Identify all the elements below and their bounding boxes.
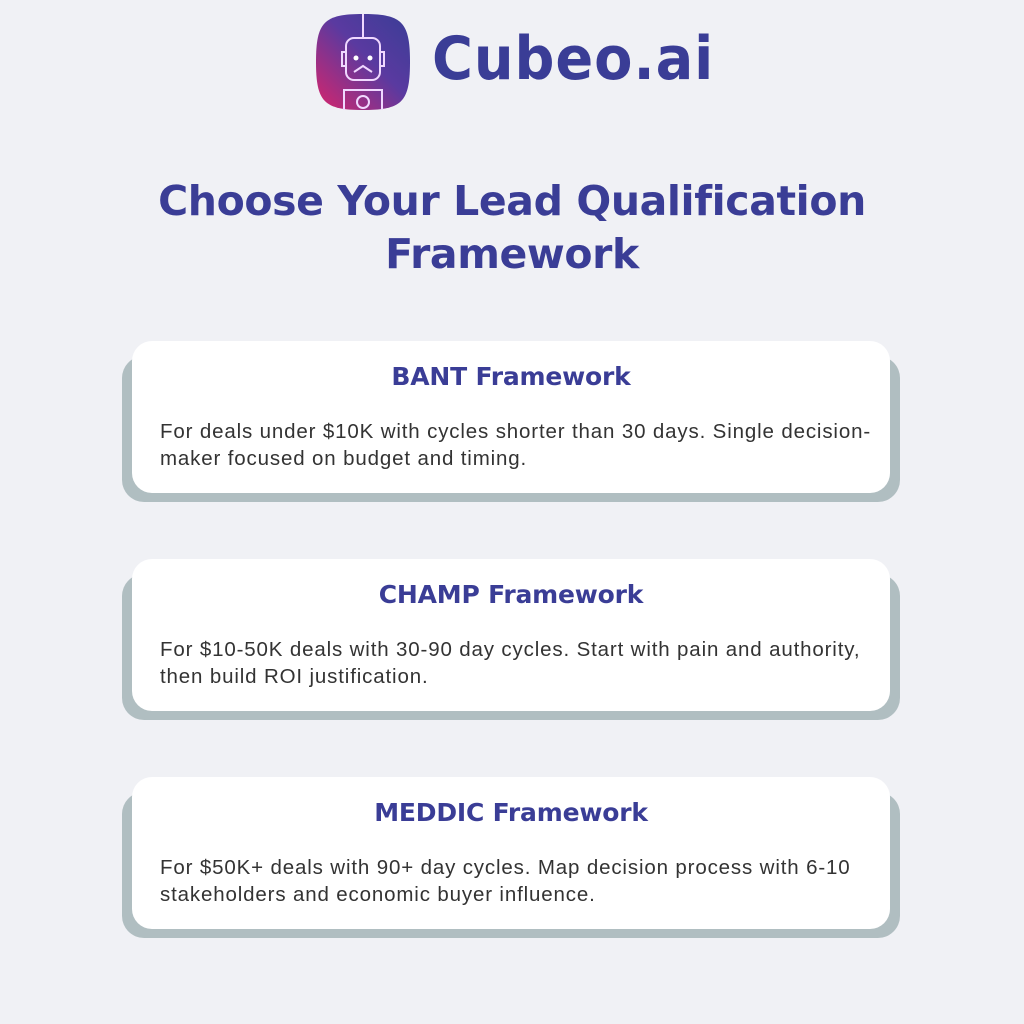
logo text: Cubeo.ai xyxy=(432,24,714,94)
panel: CHAMP: then build ROI justification. xyxy=(160,665,428,688)
panel: BANT: BANT Framework xyxy=(391,362,631,391)
panel: BANT xyxy=(132,341,890,493)
panel: CHAMP xyxy=(132,559,890,711)
panel: MEDDIC xyxy=(132,777,890,929)
panel: MEDDIC: For $50K+ deals with 90+ day cycles. Map decision process with 6-10 xyxy=(160,856,850,879)
panel: CHAMP: For $10-50K deals with 30-90 day cycles. Start with pain and authority, xyxy=(160,638,860,661)
title: Framework xyxy=(385,230,639,278)
icon: robot xyxy=(316,14,410,110)
panel: MEDDIC: stakeholders and economic buyer influence. xyxy=(160,883,596,906)
title: Choose Your Lead Qualification xyxy=(158,177,866,225)
logo xyxy=(316,14,714,110)
title xyxy=(158,177,866,278)
panel: CHAMP: CHAMP Framework xyxy=(379,580,643,609)
panel: MEDDIC: MEDDIC Framework xyxy=(374,798,648,827)
panel: BANT: maker focused on budget and timing. xyxy=(160,447,527,470)
panel: BANT: For deals under $10K with cycles shorter than 30 days. Single decision- xyxy=(160,420,871,443)
